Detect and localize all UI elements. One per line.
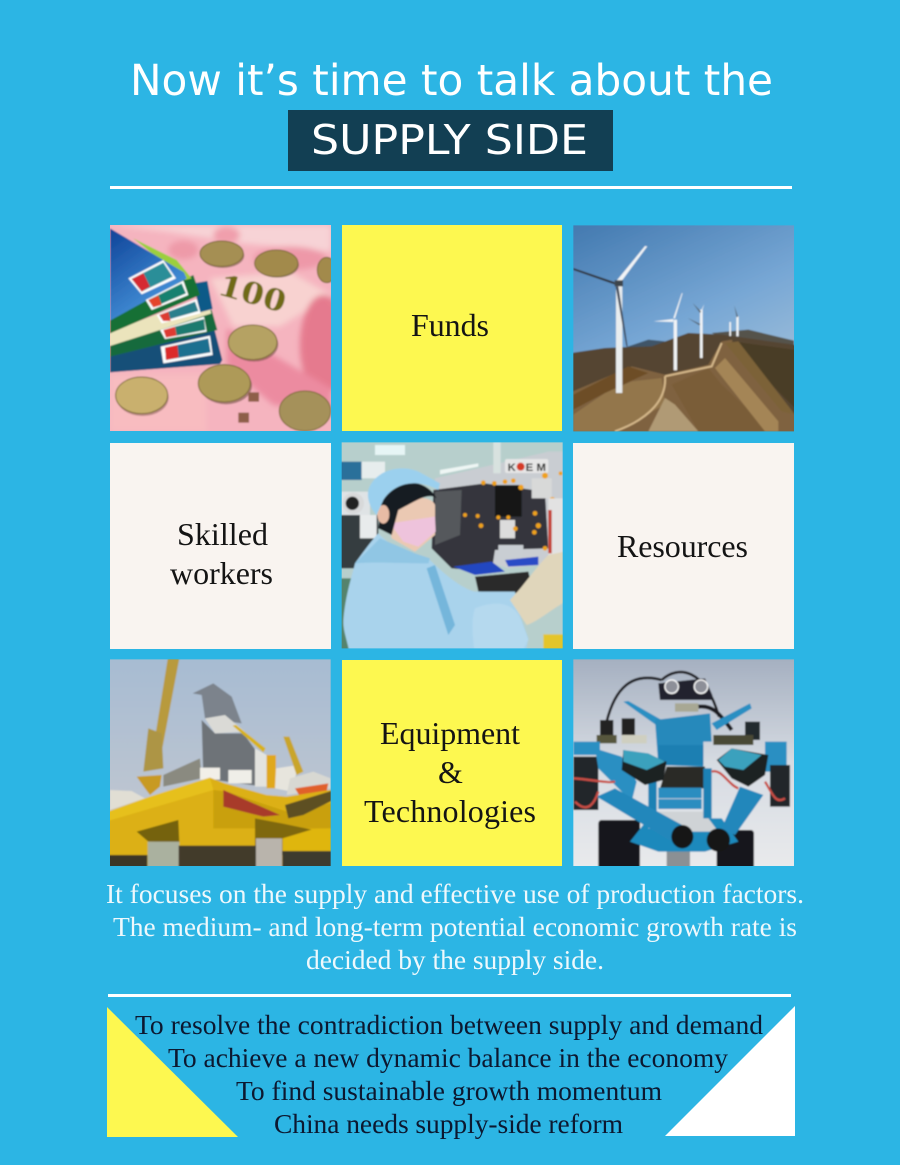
panel: skilled workers [110,443,331,649]
coins [116,241,336,431]
paragraph: supply side description [106,878,804,975]
callout: why china needs reform [107,1006,795,1139]
photo: factory worker in cleanroom suit [342,442,563,648]
hull [110,777,331,866]
sensor head [658,678,712,700]
yellow corner triangle [107,1007,238,1137]
panel: funds: Funds [411,307,489,343]
photo: bank cards, coins and banknotes [110,225,331,431]
arms on top [623,701,662,727]
photo: yellow offshore oil rig [110,659,331,866]
title badge: supply side: SUPPLY SIDE [311,116,588,164]
treads [598,820,640,870]
glove [510,552,563,626]
paragraph: supply side description: decided by the supply side. [306,944,604,975]
panel: equipment and technologies: Equipment [380,715,520,751]
callout text: To resolve the contradiction between supply and demand [135,1009,763,1040]
title [130,56,773,171]
derrick [193,683,242,723]
callout text: To find sustainable growth momentum [236,1075,662,1106]
white corner triangle [665,1006,795,1136]
callout text: China needs supply-side reform [274,1108,623,1139]
panel: skilled workers: Skilled [177,516,268,552]
suit [343,533,528,655]
crane [155,659,180,748]
title badge: supply side [288,110,613,171]
panel: funds [342,225,562,431]
cables [607,672,719,722]
panel: equipment and technologies [342,660,562,866]
face and cap [385,497,435,552]
left shoulder and arm [573,742,600,755]
title: Now it’s time to talk about the [130,56,773,106]
panel: equipment and technologies: Technologies [364,793,536,829]
photo: factory worker in cleanroom suit: K EM [508,462,546,474]
card fan [110,325,222,372]
torso [655,713,712,767]
panel: resources: Resources [617,528,748,564]
right shoulder and arm [765,742,787,772]
grippers [671,825,693,848]
photo: wind turbines on a ridge [573,225,794,432]
panel: equipment and technologies: & [438,754,463,790]
photo: blue robot kit [573,659,794,866]
callout text: To achieve a new dynamic balance in the economy [168,1042,728,1073]
paragraph: supply side description: The medium- and long-term potential economic growth rate is [113,911,797,942]
paragraph: supply side description: It focuses on the supply and effective use of production factors. [106,878,804,909]
panel: resources [573,443,794,649]
sensors [600,720,613,737]
callout text [135,1009,763,1139]
panel: skilled workers: workers [170,555,273,591]
turbines [573,246,739,393]
100 numeral: 100 [215,266,291,321]
machine label [505,459,548,473]
